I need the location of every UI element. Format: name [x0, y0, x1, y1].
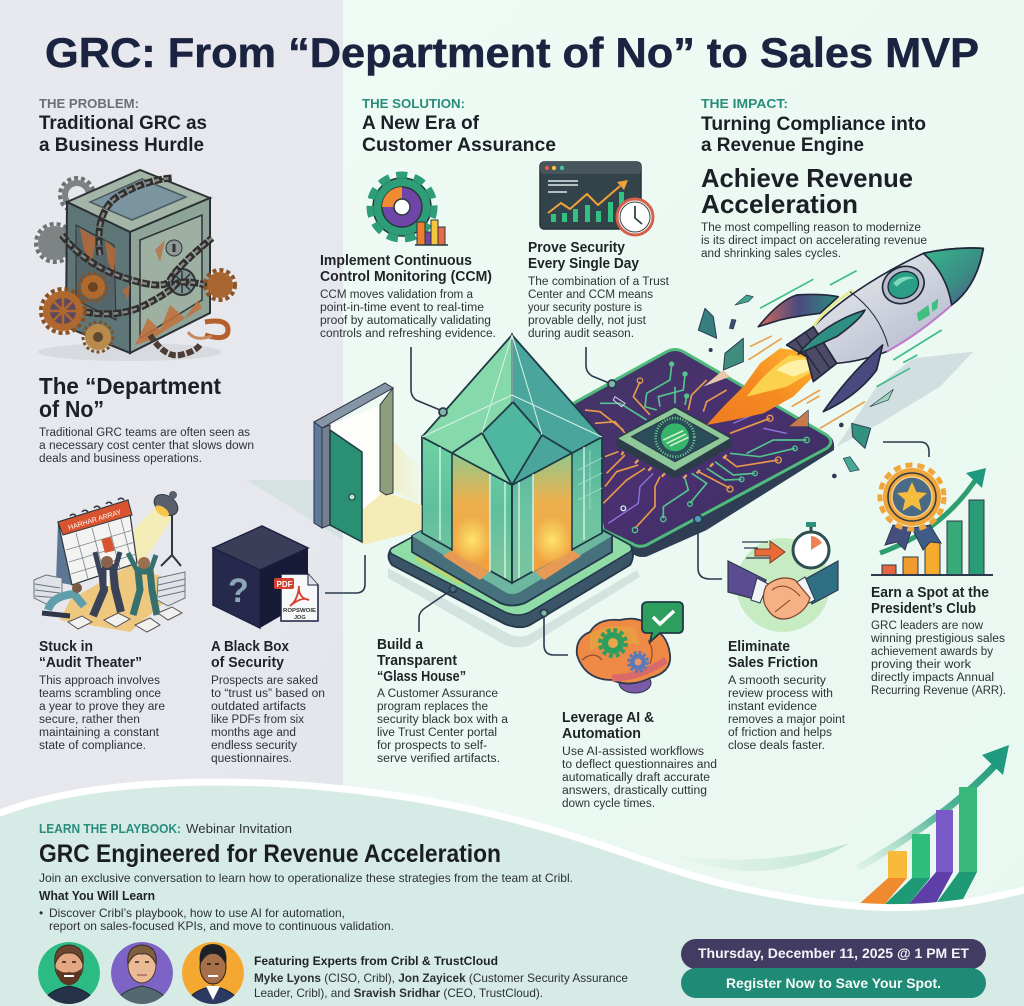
text block: the department of no: of No” [39, 396, 104, 422]
text block: stuck in audit theater: This approach involves [39, 675, 160, 687]
what you will learn [39, 889, 394, 933]
register button: Register Now to Save Your Spot. [726, 975, 941, 991]
heading: the impact: a Revenue Engine [701, 134, 864, 156]
date pill [681, 939, 986, 969]
text block: achieve revenue acceleration: Acceleration [701, 189, 858, 219]
connector: glass house pin [419, 586, 456, 632]
text block: achieve revenue acceleration: is its direct impact on accelerating revenue [701, 235, 927, 247]
connector: sales friction pin [694, 515, 722, 579]
webinar description: Join an exclusive conversation to learn how to operationalize these strategies from the team at Cribl. [39, 871, 573, 885]
text block: achieve revenue acceleration: The most compelling reason to modernize [701, 222, 921, 234]
text block: achieve revenue acceleration: and shrinking sales cycles. [701, 248, 841, 260]
text block: prove security every single day: Center and CCM means [528, 289, 653, 301]
text block: featuring experts: Featuring Experts from Cribl & TrustCloud [254, 954, 498, 968]
icon: circuit board with chip [573, 349, 834, 557]
icon: black box with pdf: ? [228, 572, 249, 610]
swoosh accent [660, 843, 850, 871]
text block: implement continuous control monitoring [320, 253, 496, 340]
text block: earn a spot at the president's club: GRC leaders are now [871, 620, 984, 632]
text: learn the playbook label [39, 821, 292, 836]
text block: stuck in audit theater [39, 639, 165, 752]
icon: black box with pdf: PDF [276, 580, 293, 589]
text block: build a transparent glass house: A Customer Assurance [377, 688, 498, 700]
text block: earn a spot at the president's club: proving their work [871, 659, 971, 671]
panel: webinar wave background [0, 782, 1024, 1006]
icon: medal and growth bars [871, 465, 993, 575]
text block: implement continuous control monitoring: proof by automatically validating [320, 315, 491, 327]
text block: earn a spot at the president's club [870, 585, 1006, 697]
text block: the department of no: a necessary cost center that slows down [39, 440, 254, 452]
text block: build a transparent glass house: Transparent [377, 653, 457, 669]
text block: leverage AI and automation: Automation [562, 726, 641, 742]
text block: a black box of security: outdated artifacts [211, 701, 306, 713]
avatar: Myke Lyons [38, 942, 100, 1006]
text block: build a transparent glass house: program replaces the [377, 701, 488, 713]
text block: a black box of security: like PDFs from six [211, 714, 304, 726]
text block: a black box of security: of Security [211, 655, 284, 671]
icon: brain with gears [577, 602, 683, 693]
heading: the solution: THE SOLUTION: [362, 96, 465, 111]
heading: the impact: THE IMPACT: [701, 96, 788, 111]
icon: handshake and stopwatch [728, 522, 838, 632]
heading: the solution [362, 96, 556, 156]
webinar heading: GRC Engineered for Revenue Acceleration [39, 840, 501, 868]
text block: leverage AI and automation: down cycle times. [562, 798, 655, 810]
text block: earn a spot at the president's club: achievement awards by [871, 646, 993, 658]
icon: rocket [698, 248, 983, 478]
text block: leverage AI and automation: Leverage AI & [562, 710, 655, 726]
text block: implement continuous control monitoring: CCM moves validation from a [320, 289, 474, 301]
text block: implement continuous control monitoring: Control Monitoring (CCM) [320, 269, 492, 285]
text block: stuck in audit theater: maintaining a constant [39, 727, 160, 739]
text block: earn a spot at the president's club: Recurring Revenue (ARR). [871, 685, 1006, 697]
chart: rising bars with arrow [858, 745, 1009, 905]
text block: stuck in audit theater: state of compliance. [39, 740, 146, 752]
text: learn the playbook label: LEARN THE PLAYBOOK: [39, 821, 181, 836]
heading: the problem: a Business Hurdle [39, 134, 204, 156]
heading: the impact: Turning Compliance into [701, 113, 926, 135]
text block: build a transparent glass house: security black box with a [377, 714, 509, 726]
rocket shadow [837, 352, 973, 447]
text block: leverage AI and automation: Use AI-assisted workflows [562, 746, 704, 758]
text block: earn a spot at the president's club: winning prestigious sales [870, 633, 1005, 645]
icon: audit theater scene [34, 490, 185, 632]
text block: a black box of security: A Black Box [211, 639, 289, 655]
connector: president's club [883, 442, 929, 457]
icon: chained rusty safe [36, 170, 235, 361]
text block: eliminate sales friction [728, 639, 846, 752]
what you will learn: • [39, 906, 43, 920]
text block: leverage AI and automation: answers, drastically cutting [562, 785, 707, 797]
text block: prove security every single day: your security posture is [528, 302, 642, 314]
text block: implement continuous control monitoring: point-in-time event to real-time [320, 302, 484, 314]
text block: eliminate sales friction: review process with [728, 688, 833, 700]
text block: implement continuous control monitoring: Implement Continuous [320, 253, 472, 269]
text block: prove security every single day: The combination of a Trust [528, 276, 670, 288]
text block: prove security every single day: Every Single Day [528, 256, 639, 272]
text block: earn a spot at the president's club: Earn a Spot at the [871, 585, 989, 601]
text block: the department of no: Traditional GRC teams are often seen as [39, 427, 250, 439]
text block: achieve revenue acceleration: Achieve Revenue [701, 163, 913, 193]
text block: build a transparent glass house: Build a [377, 637, 424, 653]
text block: eliminate sales friction: Eliminate [728, 639, 790, 655]
connector: black box to glass house [325, 555, 365, 593]
icon: open door with light [314, 383, 422, 545]
text block: stuck in audit theater: a year to prove they are [39, 701, 165, 713]
what you will learn: What You Will Learn [39, 889, 155, 903]
text block: eliminate sales friction: instant evidence [728, 701, 817, 713]
text block: a black box of security: months age and [211, 727, 296, 739]
connector: CCM pin [411, 347, 447, 416]
text block: stuck in audit theater: teams scrambling once [39, 688, 161, 700]
text block: eliminate sales friction: A smooth security [728, 675, 826, 687]
text block: earn a spot at the president's club: President’s Club [871, 601, 976, 617]
text block: a black box of security: endless security [211, 740, 297, 752]
text block: a black box of security: Prospects are saked [211, 675, 318, 687]
icon: dashboard with clock [540, 162, 653, 235]
text block: achieve revenue acceleration [701, 163, 927, 260]
text block: build a transparent glass house: serve verified artifacts. [377, 753, 500, 765]
text block: implement continuous control monitoring: controls and refreshing evidence. [320, 328, 496, 340]
what you will learn: Discover Cribl’s playbook, how to use AI for automation, [49, 906, 345, 920]
avatar: Jon Zayicek [111, 942, 173, 1006]
icon: black box with pdf: JOG [294, 615, 306, 621]
date pill: Thursday, December 11, 2025 @ 1 PM ET [698, 945, 969, 961]
platform shadow [388, 568, 640, 648]
text block: eliminate sales friction: removes a major point [728, 714, 846, 726]
text block: prove security every single day [528, 240, 670, 340]
text block: build a transparent glass house [377, 637, 509, 765]
icon: black box with pdf [213, 526, 318, 628]
icon: audit theater scene: HARHAR ARRAY [68, 509, 122, 532]
text block: featuring experts: Myke Lyons (CISO, Cribl), Jon Zayicek (Customer Security Assurance [254, 971, 628, 985]
avatar: Sravish Sridhar [182, 942, 244, 1006]
text block: build a transparent glass house: for prospects to self- [377, 740, 487, 752]
icon: black box with pdf: ROPSWOIE [283, 608, 316, 614]
text block: a black box of security [211, 639, 325, 765]
text block: a black box of security: to “trust us” based on [211, 688, 325, 700]
heading: the problem: THE PROBLEM: [39, 96, 139, 111]
text: learn the playbook label: Webinar Invitation [186, 821, 292, 836]
connector: prove security pin [586, 347, 616, 388]
text block: the department of no: The “Department [39, 373, 221, 399]
text block: build a transparent glass house: live Trust Center portal [377, 727, 497, 739]
heading: the problem: Traditional GRC as [39, 112, 207, 134]
heading: the solution: Customer Assurance [362, 134, 556, 156]
heading: the impact [701, 96, 926, 156]
text block: eliminate sales friction: Sales Friction [728, 655, 818, 671]
text block: stuck in audit theater: “Audit Theater” [39, 655, 142, 671]
heading: the solution: A New Era of [362, 112, 479, 134]
text block: the department of no: deals and business operations. [39, 453, 202, 465]
text block: eliminate sales friction: close deals faster. [728, 740, 825, 752]
icon: transparent glass house [388, 335, 633, 627]
text block: a black box of security: questionnaires. [211, 753, 292, 765]
text block: prove security every single day: Prove Security [528, 240, 625, 256]
text block: build a transparent glass house: “Glass House” [377, 669, 466, 685]
text block: earn a spot at the president's club: directly impacts Annual [871, 672, 994, 684]
text block: leverage AI and automation: automatically draft accurate [562, 772, 710, 784]
text block: the department of no [39, 373, 254, 465]
text block: prove security every single day: during audit season. [528, 328, 634, 340]
connector: AI pin [540, 610, 568, 655]
heading: the problem [39, 96, 207, 156]
text block: leverage AI and automation [562, 710, 717, 810]
icon: gear with donut chart [370, 175, 448, 245]
text block: stuck in audit theater: Stuck in [39, 639, 93, 655]
text block: featuring experts: Leader, Cribl), and Sravish Sridhar (CEO, TrustCloud). [254, 986, 543, 1000]
text block: prove security every single day: provable delly, not just [528, 315, 647, 327]
text block: stuck in audit theater: secure, rather then [39, 714, 140, 726]
title: GRC: From “Department of No” to Sales MVP [45, 29, 979, 76]
what you will learn: report on sales-focused KPIs, and move to continuous validation. [49, 919, 394, 933]
text block: eliminate sales friction: of friction and helps [728, 727, 832, 739]
text block: featuring experts [254, 954, 628, 1000]
text block: leverage AI and automation: to deflect questionnaires and [562, 759, 717, 771]
register button [681, 968, 986, 998]
